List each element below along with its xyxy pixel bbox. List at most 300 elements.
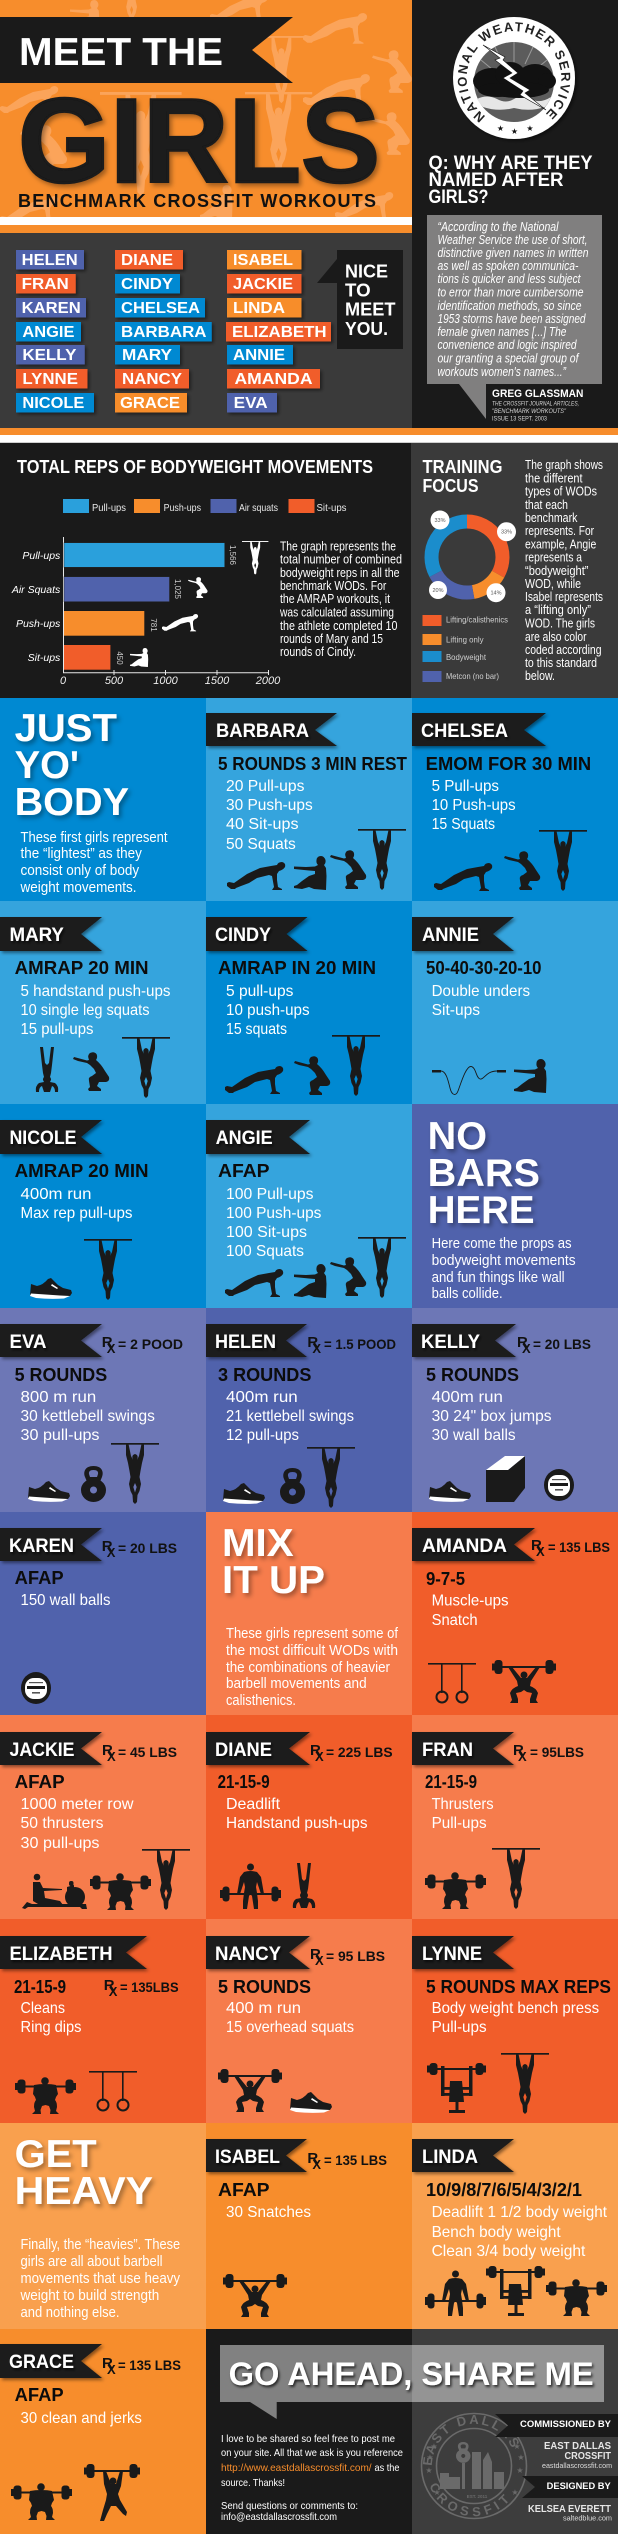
credit: commissioned by: EAST DALLAS [544, 2441, 611, 2452]
tag: Eva: EVA [234, 395, 268, 412]
prescribed weight [102, 2355, 181, 2377]
icons: exercises [223, 1447, 355, 1508]
panel: Isabel [206, 2123, 412, 2329]
exercise list: 10 single leg squats [20, 1002, 150, 1019]
heading: question: NAMED AFTER [428, 170, 564, 191]
icon: overhead squat [223, 2274, 287, 2317]
section description: the combinations of heavier [226, 1659, 390, 1676]
bar chart: 2000 [255, 675, 281, 687]
prescribed weight: R [517, 1334, 528, 1351]
banner: Nancy [206, 1936, 310, 1969]
section description: weight to build strength [20, 2287, 159, 2304]
panel: Elizabeth [0, 1919, 206, 2123]
panel: Diane [206, 1715, 412, 1919]
icons: exercises [15, 2071, 137, 2114]
logo: East Dallas CrossFit [420, 2412, 528, 2520]
logo: East Dallas CrossFit: ★ [433, 2488, 441, 2497]
quote box: female given names [...] The [438, 325, 567, 339]
credit: commissioned by: eastdallascrossfit.com [542, 2461, 612, 2470]
exercise list: Pull-ups [432, 2019, 487, 2036]
section heading: GET [15, 2133, 97, 2176]
prescribed weight: X [107, 2362, 116, 2377]
donut legend: Metcon (no bar) [446, 671, 499, 681]
chart legend: Air squats [239, 502, 278, 514]
training focus explanation: coded according [525, 642, 602, 657]
prescribed weight [513, 1742, 584, 1764]
bar chart: 0 [60, 675, 67, 687]
chart explanation: the AMRAP workouts, it [280, 591, 390, 606]
chart explanation: The graph represents the [280, 539, 396, 554]
tag: Nancy: NANCY [122, 371, 182, 388]
bar chart: 1,025 [173, 579, 182, 600]
banner: Fran [412, 1732, 514, 1765]
banner: Isabel [206, 2139, 307, 2172]
exercise list: 20 Pull-ups [226, 778, 304, 795]
training focus explanation: represents a [525, 550, 583, 565]
prescribed weight: X [107, 1545, 116, 1560]
tag: Karen: KAREN [22, 300, 81, 317]
prescribed weight: R [104, 1977, 115, 1994]
attribution: Greg Glassman: GREG GLASSMAN [492, 388, 583, 400]
prescribed weight: R [102, 2355, 113, 2372]
share message: http://www.eastdallascrossfit.com/ [221, 2462, 372, 2474]
subtitle: BENCHMARK CROSSFIT WORKOUTS [18, 191, 376, 211]
exercise list: 100 Push-ups [226, 1205, 321, 1222]
logo: East Dallas CrossFit: CROSSFIT [430, 2483, 508, 2516]
panel: Helen [206, 1308, 412, 1512]
panel: Eva [0, 1308, 206, 1512]
callout: go ahead, share me: GO AHEAD, SHARE ME [229, 2356, 594, 2392]
bar chart: 1000 [153, 675, 179, 687]
section description: movements that use heavy [20, 2270, 181, 2287]
prescribed weight: = 20 LBS [118, 1540, 177, 1556]
exercise list [226, 1796, 368, 1832]
donut chart: 33% [501, 530, 512, 536]
banner: Linda: LINDA [422, 2147, 478, 2168]
banner: Barbara: BARBARA [216, 721, 309, 742]
section heading [15, 707, 129, 824]
banner: Chelsea [412, 713, 546, 746]
prescribed weight: = 225 LBS [326, 1744, 393, 1760]
donut chart: 14% [490, 591, 502, 597]
banner: Karen [0, 1528, 102, 1561]
section heading: BARS [428, 1152, 540, 1195]
training focus explanation: represents. For [525, 523, 595, 538]
tag: Angie: ANGIE [22, 324, 75, 341]
section description: calisthenics. [226, 1692, 296, 1709]
panel: get heavy intro [0, 2123, 206, 2329]
icons: exercises [220, 1863, 315, 1909]
bar chart: 1500 [205, 675, 230, 687]
tag: Chelsea: CHELSEA [121, 300, 200, 317]
section description [226, 1625, 399, 1709]
share message [221, 2433, 403, 2523]
workout scheme: 21-15-9 [425, 1772, 477, 1792]
banner: Mary: MARY [10, 925, 64, 946]
tag: Kelly: KELLY [22, 347, 77, 364]
workout scheme: 9-7-5 [426, 1569, 465, 1589]
quote box: to error than more cumbersome [438, 286, 584, 300]
chart explanation: rounds of Cindy. [280, 644, 356, 659]
quote box: our granting a special group of [438, 352, 580, 366]
prescribed weight: R [307, 2150, 318, 2167]
exercise list: Muscle-ups [432, 1593, 509, 1610]
donut legend [422, 615, 508, 682]
share message: I love to be shared so feel free to post me [221, 2433, 395, 2445]
heading: question [428, 153, 593, 208]
heading: training focus: TRAINING [422, 457, 502, 477]
prescribed weight: R [513, 1742, 524, 1759]
section heading: BODY [15, 781, 129, 824]
exercise list [226, 1389, 354, 1444]
heading: training focus [422, 457, 502, 496]
banner: Mary [0, 917, 102, 951]
chart explanation: bodyweight reps in all the [280, 565, 400, 580]
exercise list [20, 983, 170, 1038]
chart heading: TOTAL REPS OF BODYWEIGHT MOVEMENTS [17, 457, 373, 477]
exercise list: Cleans [20, 2000, 65, 2017]
section heading: MIX [222, 1522, 294, 1565]
workout scheme: AMRAP 20 MIN [15, 1161, 149, 1181]
banner: Elizabeth [0, 1936, 147, 1969]
prescribed weight: X [312, 1341, 321, 1356]
tag: Cindy: CINDY [121, 276, 173, 293]
exercise list [20, 1389, 155, 1444]
exercise list: Handstand push-ups [226, 1815, 368, 1832]
exercise list [432, 1389, 552, 1444]
exercise list: 50 thrusters [20, 1815, 104, 1832]
quote box: as well as spoken communica- [438, 259, 578, 273]
logo: East Dallas CrossFit: EST. 2011 [467, 2494, 488, 2499]
prescribed weight: X [107, 1341, 116, 1356]
workout scheme: EMOM FOR 30 MIN [426, 754, 591, 774]
chart explanation: rounds of Mary and 15 [280, 631, 383, 646]
tag: Eva [227, 393, 277, 412]
chart explanation: the athlete completed 10 [280, 618, 398, 633]
panel: Karen [0, 1512, 206, 1715]
prescribed weight [102, 1334, 183, 1356]
section description: balls collide. [432, 1285, 503, 1302]
bar chart: 500 [105, 675, 124, 687]
quote box [427, 215, 602, 419]
tag: Linda [227, 298, 302, 318]
logo: East Dallas CrossFit: ★ [516, 2466, 524, 2475]
section description: the “lightest” as they [20, 845, 142, 862]
panel: Linda [412, 2123, 618, 2329]
training focus explanation [525, 457, 603, 683]
donut chart [429, 510, 516, 602]
exercise list: 5 handstand push-ups [20, 983, 170, 1000]
title: girls: GIRLS [18, 74, 380, 208]
exercise list: Bench body weight [432, 2224, 561, 2241]
banner: Amanda [412, 1528, 535, 1561]
exercise list: 30 wall balls [432, 1427, 516, 1444]
callout: nice to meet you [317, 250, 403, 349]
exercise list: 15 squats [226, 1021, 287, 1038]
section heading: HERE [428, 1189, 534, 1232]
exercise list [20, 2000, 82, 2036]
tag: Annie: ANNIE [233, 347, 285, 364]
section heading: JUST [15, 707, 117, 750]
prescribed weight: R [310, 1946, 321, 1963]
share message: as the [374, 2462, 400, 2474]
section description: barbell movements and [226, 1675, 367, 1692]
credit: commissioned by: CROSSFIT [564, 2451, 611, 2462]
logo: East Dallas CrossFit: ★ [517, 2453, 525, 2462]
prescribed weight: X [107, 1749, 116, 1764]
icons: exercises [427, 2053, 549, 2114]
share message: source. Thanks! [221, 2477, 285, 2489]
exercise list [432, 983, 530, 1019]
workout scheme: 5 ROUNDS 3 MIN REST [218, 754, 407, 774]
exercise list: Deadlift [226, 1796, 281, 1813]
exercise list: 15 Squats [432, 816, 495, 833]
tag: Kelly [16, 345, 85, 364]
prescribed weight [517, 1334, 591, 1356]
banner: Annie [412, 917, 514, 951]
bar chart: Sit-ups [28, 652, 61, 664]
icons: exercises [36, 1037, 170, 1098]
training focus explanation: “bodyweight” [525, 563, 588, 578]
exercise list: Body weight bench press [432, 2000, 599, 2017]
prescribed weight: = 1.5 POOD [324, 1336, 396, 1352]
panel: Kelly [412, 1308, 618, 1512]
share message: on your site. All that we ask is you reference [221, 2447, 403, 2459]
icons: exercises [429, 1456, 574, 1502]
tag: Mary [115, 345, 180, 364]
logo: National Weather Service: ★ [511, 127, 518, 136]
exercise list: 1000 meter row [20, 1796, 134, 1813]
exercise list: Thrusters [432, 1796, 494, 1813]
section description: Here come the props as [432, 1235, 572, 1252]
exercise list: Ring dips [20, 2019, 82, 2036]
exercise list: 30 Push-ups [226, 797, 313, 814]
banner: Angie: ANGIE [216, 1128, 273, 1149]
section description: consist only of body [20, 862, 140, 879]
tag: Grace: GRACE [120, 395, 180, 412]
quote box: “According to the National [438, 220, 560, 234]
exercise list: 5 pull-ups [226, 983, 293, 1000]
exercise list: 100 Pull-ups [226, 1186, 314, 1203]
exercise list: 400m run [226, 1389, 298, 1406]
workout scheme: 21-15-9 [14, 1977, 66, 1997]
donut legend: Lifting/calisthenics [446, 615, 508, 625]
icons: exercises [30, 1239, 132, 1300]
banner: Cindy: CINDY [215, 925, 271, 946]
banner: Grace: GRACE [9, 2352, 74, 2373]
icons: exercises [28, 1443, 159, 1504]
banner: Lynne [412, 1936, 514, 1969]
tag: Nicole: NICOLE [22, 395, 85, 412]
exercise list [226, 778, 313, 853]
bar chart: 1,566 [228, 545, 237, 566]
workout scheme: 21-15-9 [218, 1772, 270, 1792]
callout: go ahead, share me [220, 2345, 604, 2419]
panel: training focus [411, 443, 618, 698]
prescribed weight: = 135 LBS [548, 1539, 610, 1555]
bar chart: 781 [149, 618, 158, 632]
section description: These girls represent some of [226, 1625, 399, 1642]
section description [432, 1235, 576, 1302]
exercise list: Sit-ups [432, 1002, 480, 1019]
exercise list: 10 Push-ups [432, 797, 516, 814]
logo: National Weather Service: ★ [497, 124, 504, 133]
tag: Nicole [16, 393, 94, 412]
workout scheme: 5 ROUNDS [218, 1977, 311, 1997]
prescribed weight: = 135LBS [120, 1979, 179, 1995]
attribution: Greg Glassman: THE CROSSFIT JOURNAL ARTICLES, [492, 402, 579, 408]
icons: exercises [218, 2069, 332, 2113]
banner: Isabel: ISABEL [215, 2147, 280, 2168]
banner: Annie: ANNIE [422, 925, 479, 946]
share message: info@eastdallascrossfit.com [221, 2511, 337, 2523]
workout scheme: AMRAP IN 20 MIN [218, 958, 376, 978]
quote box: 1953 storms have been assigned [438, 312, 586, 326]
banner: Fran: FRAN [422, 1740, 473, 1761]
icon: wall ball [21, 1672, 51, 1704]
attribution: Greg Glassman: ISSUE 13 SEPT. 2003 [492, 417, 548, 423]
panel: Nancy [206, 1919, 412, 2123]
icons: exercises [11, 2464, 140, 2521]
training focus explanation: WOD, while [525, 576, 581, 591]
chart explanation: was calculated assuming [279, 605, 394, 620]
icons: exercises [225, 1035, 380, 1096]
exercise list: 100 Squats [226, 1243, 304, 1260]
training focus explanation: below. [525, 668, 555, 683]
training focus explanation: types of WODs [525, 484, 597, 499]
tag: Amanda: AMANDA [234, 371, 313, 388]
logo: East Dallas CrossFit: EAST DALLAS [422, 2415, 519, 2465]
exercise list [226, 1186, 321, 1260]
hero panel: meet the girls [0, 0, 412, 233]
training focus explanation: a “lifting only” [525, 602, 591, 617]
training focus explanation: the different [525, 471, 583, 486]
tag: Helen: HELEN [22, 252, 78, 269]
callout: nice to meet you: MEET [345, 300, 396, 320]
prescribed weight: R [102, 1742, 113, 1759]
section description [20, 2236, 181, 2321]
bar chart: 450 [115, 651, 124, 665]
exercise list: Pull-ups [432, 1815, 487, 1832]
chart explanation [279, 539, 402, 659]
logo: East Dallas CrossFit: ★ [425, 2466, 433, 2475]
panel: Fran [412, 1715, 618, 1919]
prescribed weight [102, 1538, 177, 1560]
tag: Amanda [227, 369, 320, 388]
panel: Lynne [412, 1919, 618, 2123]
prescribed weight: = 135 LBS [324, 2152, 387, 2168]
banner: Helen [206, 1324, 307, 1357]
section description: and nothing else. [20, 2304, 120, 2321]
banner: Amanda: AMANDA [422, 1536, 507, 1557]
bar chart [11, 537, 281, 687]
workout scheme: 50-40-30-20-10 [426, 958, 542, 978]
training focus explanation: benchmark [525, 510, 578, 525]
prescribed weight: X [315, 1749, 324, 1764]
panel: Cindy [206, 901, 412, 1104]
prescribed weight: X [536, 1544, 545, 1559]
workout scheme: AFAP [15, 1772, 65, 1792]
icons: exercises [227, 829, 406, 890]
banner: Grace [0, 2344, 102, 2378]
callout: nice to meet you: TO [345, 281, 371, 301]
section heading: NO [428, 1115, 487, 1158]
panel: Amanda [412, 1512, 618, 1715]
panel: just yo' body intro [0, 698, 206, 901]
quote box: identification methods, so since [438, 299, 582, 313]
banner: Eva: EVA [10, 1332, 47, 1353]
panel: footer share and credits [220, 2329, 618, 2534]
training focus explanation: that each [525, 497, 568, 512]
donut legend: Bodyweight [446, 652, 487, 662]
background pattern: faint workout silhouettes [0, 0, 412, 224]
credit: designed by [522, 2476, 618, 2523]
workout scheme: AFAP [15, 2385, 64, 2405]
banner: Helen: HELEN [215, 1332, 276, 1353]
tag: Diane [115, 250, 183, 270]
banner: Angie [206, 1120, 310, 1154]
section description: Finally, the “heavies”. These [20, 2236, 180, 2253]
workout scheme: 5 ROUNDS MAX REPS [426, 1977, 611, 1997]
prescribed weight [102, 1742, 177, 1764]
donut legend: Lifting only [446, 635, 484, 645]
panel: mix it up intro [206, 1512, 412, 1715]
section description: the most difficult WODs with [226, 1642, 398, 1659]
tag: Isabel: ISABEL [233, 252, 293, 269]
credit: commissioned by: COMMISSIONED BY [520, 2419, 611, 2429]
section description: bodyweight movements [432, 1252, 576, 1269]
tag: Fran [16, 274, 76, 294]
exercise list [20, 1796, 134, 1852]
chart legend: Push-ups [164, 502, 201, 514]
prescribed weight: R [102, 1334, 113, 1351]
title banner: meet the: MEET THE [19, 31, 223, 74]
prescribed weight: = 45 LBS [118, 1744, 177, 1760]
exercise list: 15 overhead squats [226, 2019, 354, 2036]
section heading [15, 2133, 153, 2213]
chart explanation: total number of combined [280, 552, 402, 567]
tag: Lynne [16, 369, 88, 388]
prescribed weight: R [102, 1538, 113, 1555]
prescribed weight [531, 1537, 610, 1559]
exercise list: 800 m run [20, 1389, 96, 1406]
icons: exercises [425, 2266, 607, 2316]
workout scheme: AFAP [218, 1161, 270, 1181]
exercise list [432, 2000, 599, 2036]
credit: designed by: DESIGNED BY [547, 2481, 611, 2491]
prescribed weight: = 2 POOD [118, 1336, 183, 1352]
section heading: IT UP [222, 1559, 325, 1602]
chart legend: Pull-ups [92, 502, 126, 514]
donut chart: 33% [434, 518, 446, 524]
panel: Angie [206, 1104, 412, 1308]
bar chart: Pull-ups [22, 550, 61, 562]
exercise list [432, 778, 516, 833]
icons: exercises [425, 1848, 540, 1909]
exercise list: Snatch [432, 1612, 478, 1629]
logo: East Dallas CrossFit: ★ [513, 2442, 521, 2451]
banner: Linda [412, 2139, 514, 2172]
section heading [428, 1115, 540, 1232]
banner: Jackie [0, 1732, 102, 1765]
icons: exercises [428, 1660, 556, 1703]
prescribed weight: R [307, 1334, 318, 1351]
exercise list: 30 pull-ups [20, 1427, 100, 1444]
icons: exercises [434, 830, 587, 891]
banner: Karen: KAREN [9, 1536, 74, 1557]
panel: Mary [0, 901, 206, 1104]
chart legend: Sit-ups [316, 502, 346, 514]
